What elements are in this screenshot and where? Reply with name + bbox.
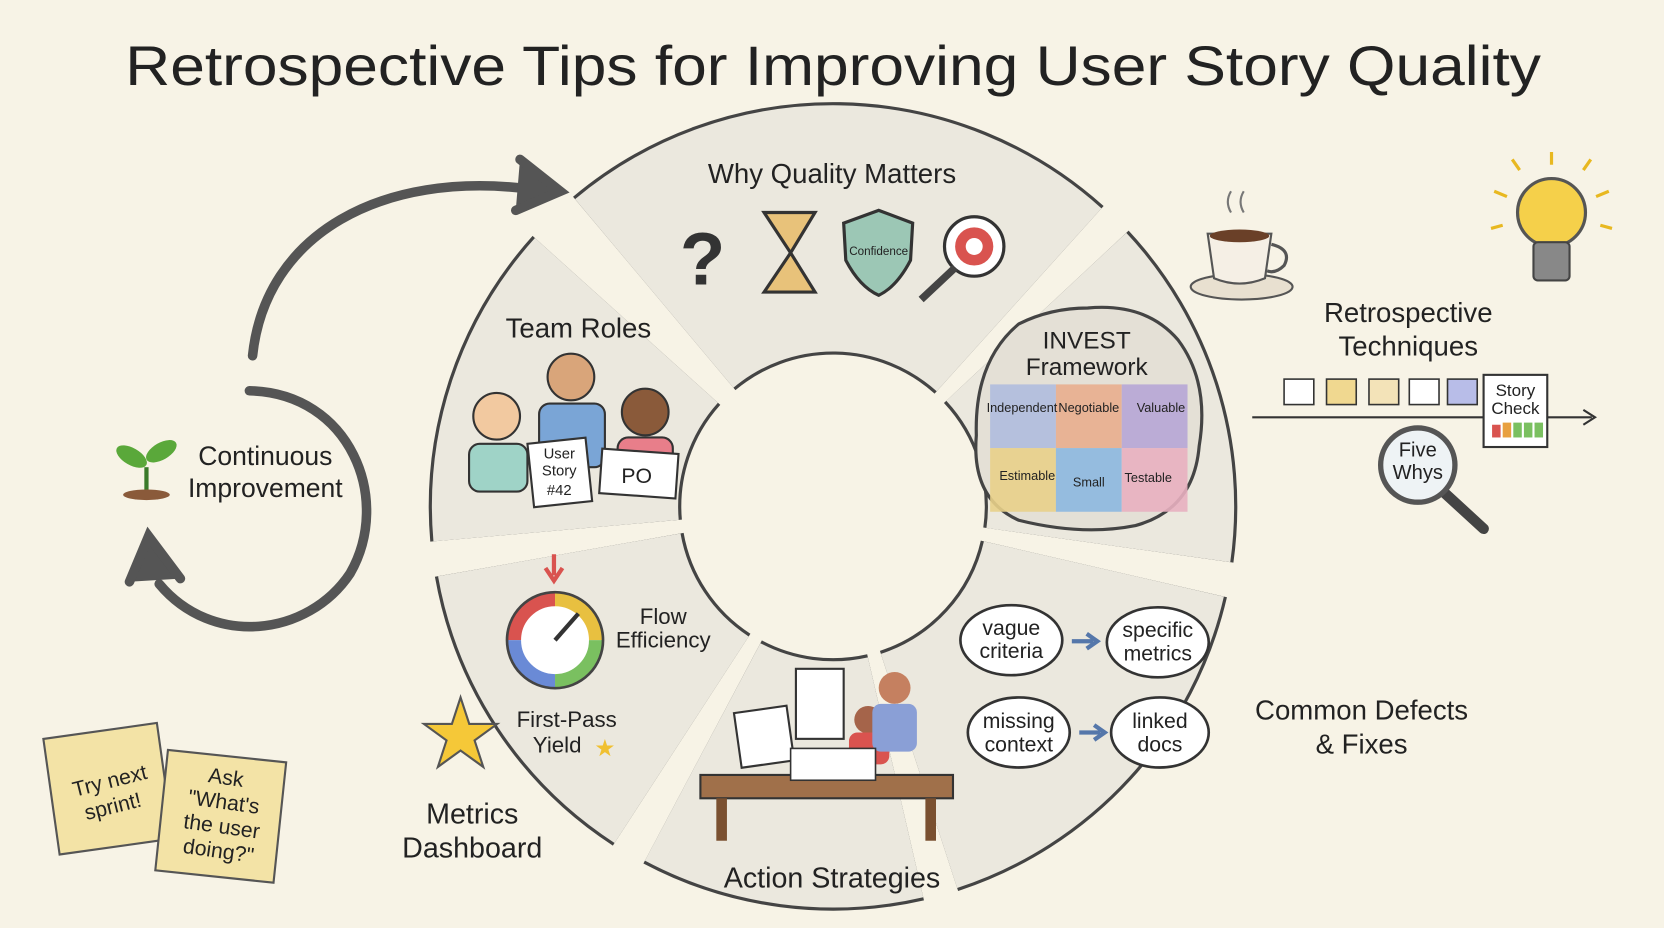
icon: magnifier five whys: Five [1399, 440, 1437, 462]
panel: common defects: context [985, 734, 1053, 757]
panel: common defects: metrics [1124, 642, 1192, 665]
icon: magnifier five whys [1381, 428, 1484, 529]
label: metrics dashboard [402, 799, 542, 865]
continuous improvement: Improvement [188, 473, 343, 503]
panel: INVEST: Negotiable [1058, 400, 1119, 415]
sticky notes: sprint! [82, 789, 144, 825]
icon: big star: ★ [418, 681, 503, 787]
title: Retrospective Tips for Improving User Story Quality [125, 35, 1541, 97]
panel: metrics: Yield [533, 733, 581, 758]
card: PO [599, 449, 679, 498]
panel: action strategies [700, 669, 953, 894]
label: common defects: & Fixes [1316, 729, 1408, 760]
panel: metrics: Flow [640, 604, 688, 629]
panel: INVEST: Testable [1125, 470, 1172, 485]
panel: common defects: linked [1132, 710, 1188, 733]
panel: INVEST: Independent [987, 400, 1058, 415]
icon: light bulb [1491, 152, 1612, 280]
panel: INVEST: Small [1073, 474, 1105, 489]
sticky notes: doing?" [182, 835, 255, 868]
icon: hourglass [764, 212, 815, 292]
panel: INVEST [976, 307, 1202, 530]
arrow: lower cycle [129, 391, 367, 627]
sticky notes: Try next [70, 761, 150, 802]
sticky notes: the user [182, 810, 261, 844]
card: user story: Story [542, 464, 577, 480]
panel: action strategies: Action Strategies [724, 862, 940, 894]
panel: metrics: First-Pass [517, 707, 617, 732]
card: user story: #42 [547, 483, 572, 499]
panel: metrics [507, 554, 712, 761]
sticky notes: "What's [187, 786, 261, 819]
panel: team roles [469, 313, 679, 507]
icon: question: ? [680, 218, 725, 301]
panel: common defects: missing [983, 710, 1055, 733]
timeline: Story [1496, 381, 1536, 400]
panel: why quality matters [680, 158, 1004, 301]
label: common defects: Common Defects [1255, 695, 1468, 726]
card: user story: User [544, 447, 575, 463]
panel: INVEST: INVEST [1043, 327, 1131, 354]
ring segments [555, 228, 1111, 784]
panel: common defects: specific [1122, 619, 1194, 642]
panel: team roles: Team Roles [506, 313, 651, 344]
card: PO: PO [621, 465, 652, 488]
panel: common defects: docs [1138, 734, 1182, 757]
icon: shield [844, 210, 913, 295]
sticky notes: Ask [207, 764, 245, 792]
icon: target [921, 217, 1004, 300]
timeline [1252, 375, 1595, 447]
panel: INVEST: Estimable [999, 468, 1055, 483]
icon: shield: Confidence [849, 245, 908, 258]
panel: INVEST: Framework [1026, 354, 1148, 381]
icon: magnifier five whys: Whys [1393, 462, 1443, 484]
panel: common defects: vague [982, 617, 1040, 640]
panel: INVEST: Valuable [1137, 400, 1185, 415]
label: metrics dashboard: Metrics [426, 799, 518, 831]
continuous improvement [113, 435, 343, 503]
icon: sprout [113, 435, 180, 500]
sticky notes [43, 723, 286, 883]
label: retrospective techniques: Techniques [1338, 331, 1478, 362]
timeline: Check [1491, 399, 1540, 418]
icon: coffee cup [1191, 191, 1293, 300]
panel: why quality matters: Why Quality Matters [708, 158, 956, 189]
panel: metrics: Efficiency [616, 628, 712, 653]
arrow: top cycle [253, 159, 560, 356]
panel: metrics: ★ [594, 735, 615, 761]
card: user story [527, 438, 592, 507]
label: metrics dashboard: Dashboard [402, 833, 542, 865]
panel: common defects: criteria [980, 640, 1043, 663]
label: retrospective techniques: Retrospective [1324, 297, 1493, 328]
continuous improvement: Continuous [198, 441, 332, 471]
label: retrospective techniques [1324, 297, 1493, 362]
panel: common defects [960, 605, 1209, 768]
label: common defects [1255, 695, 1468, 760]
